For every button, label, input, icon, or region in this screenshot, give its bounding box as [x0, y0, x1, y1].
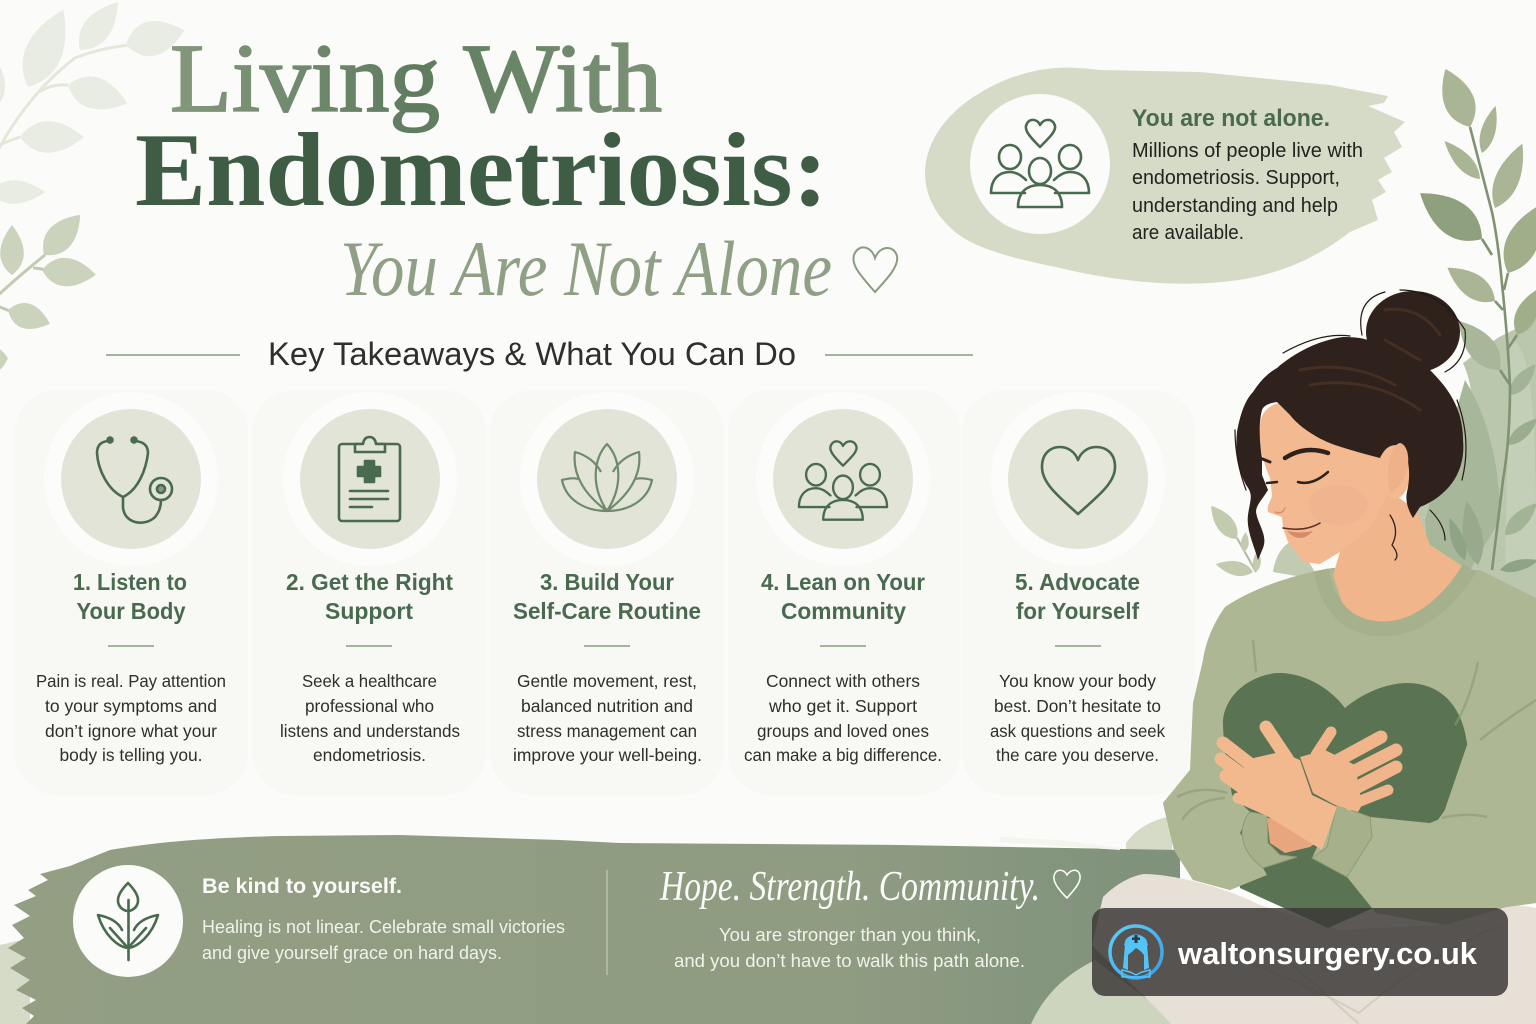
left hand: [1221, 727, 1337, 850]
panel: card 3: Gentle movement, rest,: [517, 671, 697, 691]
eyes, brows, lips: [1260, 450, 1397, 560]
panel: bottom banner: and you don’t have to walk this path alone.: [674, 950, 1025, 971]
panel: bottom banner: Healing is not linear. Celebrate small victories: [202, 916, 565, 937]
panel: bottom banner: You are stronger than you think,: [719, 924, 981, 945]
icon: sprout: [98, 883, 158, 960]
panel: card 5: best. Don’t hesitate to: [994, 696, 1161, 716]
face: [1259, 402, 1410, 564]
panel: card 2: professional who: [305, 696, 434, 716]
callout: you are not alone: are available.: [1132, 222, 1244, 244]
panel: card 1: [15, 390, 248, 795]
sweater collar: [1321, 568, 1470, 629]
icon: heart: [1042, 447, 1115, 514]
hair bun: [1366, 291, 1460, 373]
callout: you are not alone: You are not alone.: [1132, 105, 1330, 132]
panel: card 5: [962, 390, 1195, 795]
ear: [1388, 443, 1408, 493]
panel: card 5: for Yourself: [1016, 598, 1139, 624]
icon: clipboard: [339, 437, 400, 521]
panel: card 2: endometriosis.: [313, 745, 426, 765]
panel: card 5: ask questions and seek: [990, 721, 1165, 741]
right hand: [1300, 732, 1396, 812]
icon: stethoscope: [97, 438, 172, 523]
panel: card 3: [490, 390, 724, 795]
panel: card 3: improve your well-being.: [513, 745, 702, 765]
title: [135, 25, 828, 228]
logo badge: [1092, 908, 1508, 996]
panel: card 2: 2. Get the Right: [286, 569, 453, 595]
panel: card 2: [252, 390, 486, 795]
panel: card 4: groups and loved ones: [757, 721, 929, 741]
panel: card 3: stress management can: [517, 721, 697, 741]
callout: you are not alone: understanding and help: [1132, 195, 1338, 217]
sweater folds: [1177, 640, 1536, 820]
small leaves beside the woman: [1204, 501, 1320, 580]
panel: card 1: Pain is real. Pay attention: [36, 671, 226, 691]
hair: [1236, 337, 1463, 560]
panel: card 2: Seek a healthcare: [302, 671, 437, 691]
panel: card 4: Community: [781, 598, 906, 624]
decorative leaves lower left: [0, 206, 97, 372]
panel: card 3: Self-Care Routine: [513, 598, 701, 624]
title: Living With: [170, 25, 662, 132]
panel: bottom banner: Be kind to yourself.: [202, 874, 402, 898]
panel: card 1: Your Body: [76, 598, 186, 624]
panel: card 4: can make a big difference.: [744, 745, 942, 765]
section heading: Key Takeaways & What You Can Do: [268, 336, 796, 372]
heart pillow: [1223, 673, 1468, 928]
callout: you are not alone: [925, 68, 1405, 284]
panel: card 3: 3. Build Your: [540, 569, 674, 595]
panel: card 2: Support: [325, 598, 413, 624]
callout: you are not alone: Millions of people live with: [1132, 140, 1363, 162]
panel: card 5: the care you deserve.: [996, 745, 1159, 765]
panel: card 1: body is telling you.: [60, 745, 202, 765]
trousers: [1092, 874, 1536, 1024]
title: Endometriosis:: [135, 111, 828, 228]
crossed arms and hands: [1221, 727, 1396, 853]
cuffs: [1242, 805, 1372, 877]
illustration: woman hugging heart pillow: [1092, 290, 1536, 1024]
panel: card 5: You know your body: [999, 671, 1156, 691]
panel: card 4: [728, 390, 960, 795]
subtitle: You Are Not Alone: [340, 225, 832, 312]
callout: you are not alone: endometriosis. Support,: [1132, 167, 1340, 189]
panel: bottom banner: Hope. Strength. Community.: [659, 864, 1040, 910]
panel: card 3: balanced nutrition and: [521, 696, 693, 716]
icon: nurse logo: [1110, 926, 1162, 978]
decorative leaves top left: [0, 0, 188, 204]
trouser shading: [1240, 925, 1500, 1024]
panel: card 1: to your symptoms and: [45, 696, 217, 716]
sweater body: [1163, 568, 1536, 925]
icon: lotus: [562, 444, 652, 511]
panel: card 5: 5. Advocate: [1015, 569, 1140, 595]
icon: community with heart: [991, 120, 1089, 207]
face blush: [1308, 485, 1368, 525]
panel: card 1: 1. Listen to: [73, 569, 187, 595]
logo badge: waltonsurgery.co.uk: [1177, 936, 1478, 971]
icon: community: [799, 441, 887, 520]
neck and chest: [1333, 490, 1462, 634]
panel: card 4: 4. Lean on Your: [761, 569, 925, 595]
panel: bottom banner: [0, 816, 1180, 1024]
panel: card 4: Connect with others: [766, 671, 920, 691]
panel: card 1: don’t ignore what your: [45, 721, 217, 741]
panel: card 2: listens and understands: [280, 721, 460, 741]
panel: bottom banner: and give yourself grace on hard days.: [202, 942, 502, 963]
panel: card 4: who get it. Support: [768, 696, 917, 716]
hair highlights and wisps: [1235, 290, 1466, 540]
sleeves: [1163, 700, 1536, 925]
plant and watercolour foliage on the right: [1400, 63, 1536, 620]
